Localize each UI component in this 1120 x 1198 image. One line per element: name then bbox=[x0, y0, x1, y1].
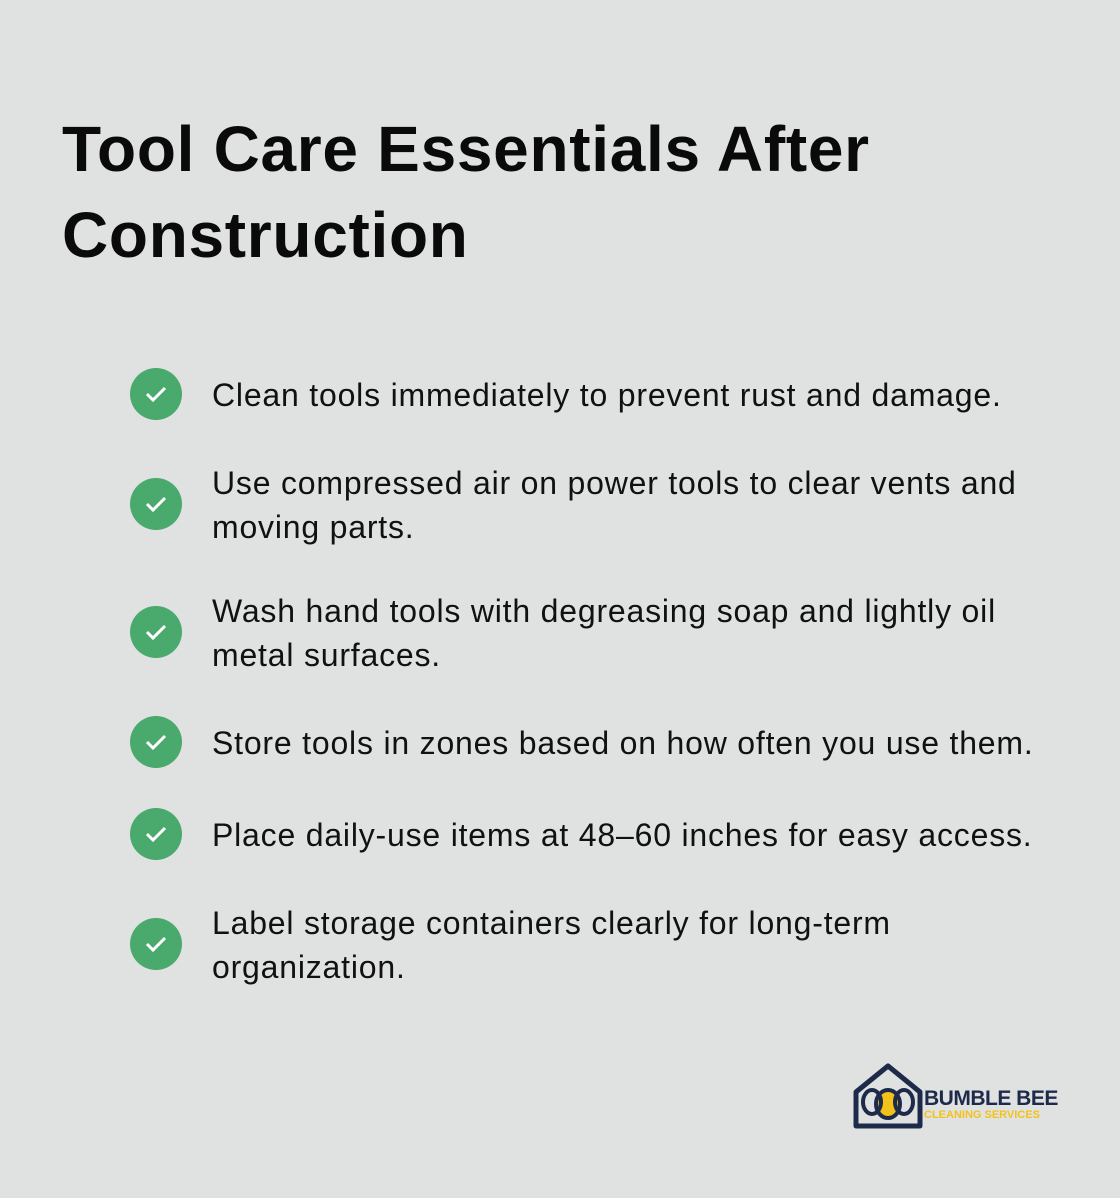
item 6 bbox=[130, 905, 891, 985]
item 3 bbox=[130, 593, 996, 673]
logo text bbox=[924, 1087, 1058, 1121]
text: Label storage containers clearly for long-term bbox=[212, 905, 891, 941]
logo text: CLEANING SERVICES bbox=[924, 1109, 1040, 1121]
item 4 bbox=[130, 716, 1034, 768]
item 1 bbox=[130, 368, 1002, 420]
icon: check bbox=[130, 478, 182, 530]
title bbox=[62, 113, 870, 271]
icon: check bbox=[130, 716, 182, 768]
icon: bee house bbox=[854, 1063, 922, 1128]
text bbox=[212, 465, 1017, 545]
text: metal surfaces. bbox=[212, 637, 441, 673]
icon: check bbox=[130, 368, 182, 420]
text bbox=[212, 905, 891, 985]
icon: check bbox=[130, 918, 182, 970]
title: Construction bbox=[62, 199, 469, 271]
text: organization. bbox=[212, 949, 406, 985]
text bbox=[212, 593, 996, 673]
text: moving parts. bbox=[212, 509, 414, 545]
text: Place daily-use items at 48–60 inches for easy access. bbox=[212, 817, 1032, 853]
icon: check bbox=[130, 808, 182, 860]
icon: check bbox=[130, 606, 182, 658]
text: Clean tools immediately to prevent rust and damage. bbox=[212, 377, 1002, 413]
title: Tool Care Essentials After bbox=[62, 113, 870, 185]
text: Wash hand tools with degreasing soap and lightly oil bbox=[212, 593, 996, 629]
text: Store tools in zones based on how often you use them. bbox=[212, 725, 1034, 761]
item 5 bbox=[130, 808, 1032, 860]
logo bbox=[854, 1063, 1058, 1128]
logo text: BUMBLE BEE bbox=[924, 1087, 1058, 1110]
item 2 bbox=[130, 465, 1017, 545]
text: Use compressed air on power tools to clear vents and bbox=[212, 465, 1017, 501]
